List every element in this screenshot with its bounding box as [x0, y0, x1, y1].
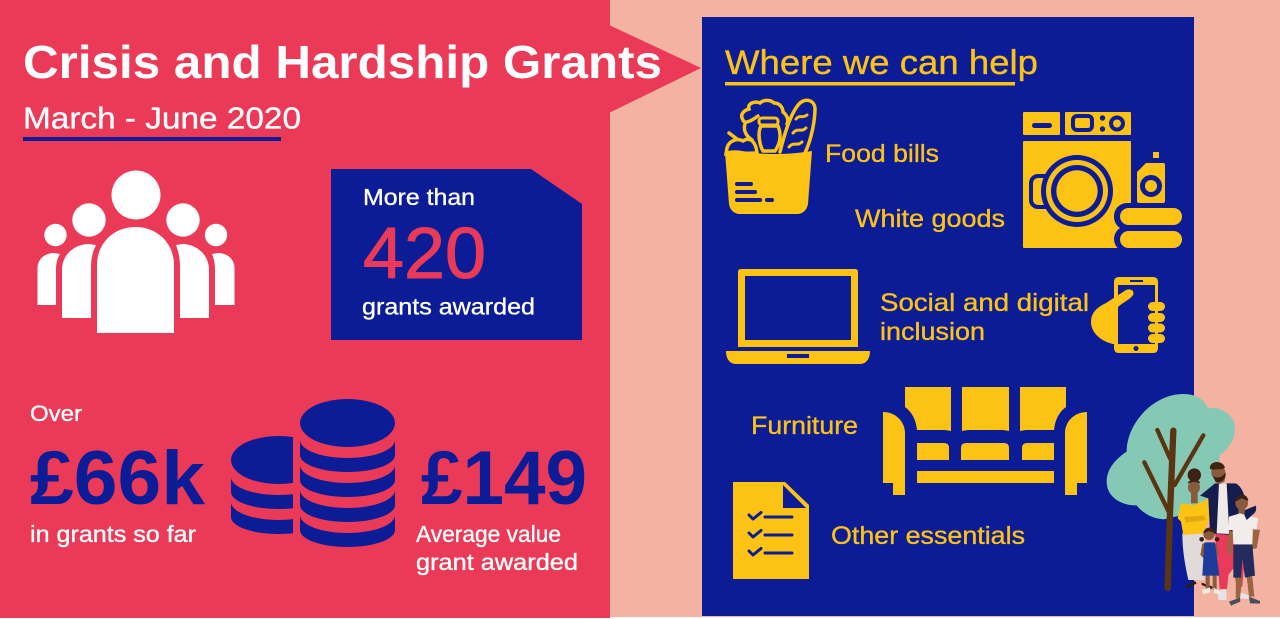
boy	[1227, 495, 1260, 606]
label: food bills: Food bills	[825, 140, 939, 168]
callout: grants awarded: More than	[363, 184, 475, 210]
illustration: tree	[1107, 394, 1235, 588]
panel: salmon background	[610, 0, 1280, 617]
label: social and digital inclusion: inclusion	[880, 318, 985, 346]
woman	[1178, 468, 1213, 589]
man	[1200, 462, 1249, 600]
icon: coin stacks	[231, 399, 395, 547]
panel: grant statistics	[0, 0, 610, 618]
stat: total in grants: in grants so far	[30, 521, 196, 547]
label: social and digital inclusion: Social and digital	[880, 289, 1089, 317]
label: furniture: Furniture	[751, 412, 858, 440]
icon: grocery bag	[725, 100, 815, 214]
label: other essentials: Other essentials	[831, 522, 1025, 550]
label: social and digital inclusion	[880, 289, 1089, 346]
stat: average grant: £149	[421, 436, 587, 521]
arrow	[609, 25, 701, 113]
label: white goods: White goods	[855, 205, 1005, 233]
stat: total in grants: Over	[30, 401, 82, 426]
icon: group of people	[38, 170, 234, 333]
icon: washing machine	[1023, 112, 1182, 252]
callout: grants awarded	[331, 169, 582, 340]
callout: grants awarded: 420	[363, 214, 486, 294]
stat: total in grants	[30, 401, 206, 547]
callout: grants awarded: grants awarded	[362, 294, 535, 320]
girl	[1199, 528, 1221, 594]
icon: laptop	[726, 269, 870, 364]
stat: average grant: Average value	[416, 521, 561, 547]
heading: where we can help: Where we can help	[725, 44, 1038, 82]
icon: hand holding phone	[1091, 277, 1165, 353]
icon: sofa	[883, 387, 1087, 495]
icon: checklist	[733, 482, 809, 579]
illustration: family	[1178, 462, 1260, 606]
title: Crisis and Hardship Grants	[23, 36, 662, 88]
stat: average grant	[416, 436, 587, 575]
stat: total in grants: £66k	[30, 436, 206, 521]
subtitle: March - June 2020	[23, 100, 301, 136]
panel: where we can help	[702, 17, 1194, 616]
stat: average grant: grant awarded	[416, 549, 578, 575]
